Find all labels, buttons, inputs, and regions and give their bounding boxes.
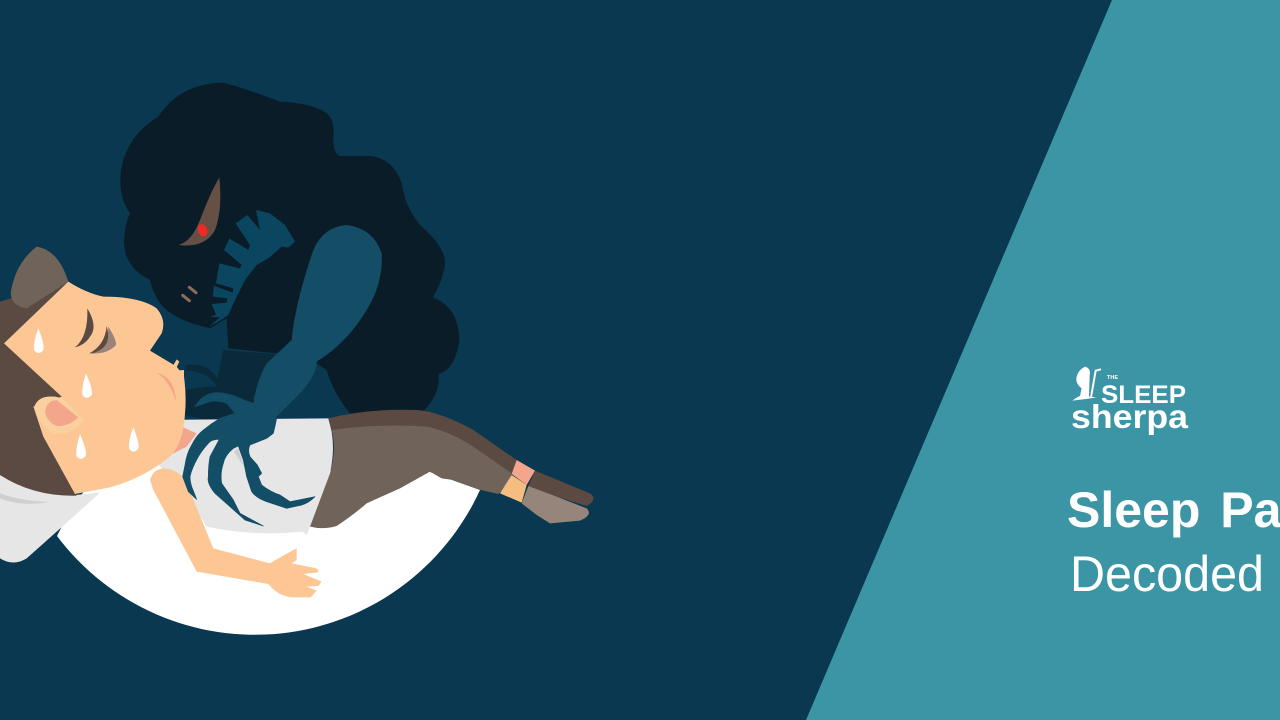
claw fingers (183, 393, 315, 526)
shadow monster (120, 83, 459, 415)
neck (168, 427, 197, 456)
monster body silhouette (120, 83, 459, 415)
sweat drop (129, 427, 139, 452)
mouth (168, 359, 184, 377)
eye shadow (89, 327, 116, 354)
red eye (196, 223, 209, 238)
nostrils (183, 287, 196, 301)
shirt (153, 418, 333, 535)
monster near arm (253, 225, 382, 420)
trousers shadow (328, 410, 517, 475)
panel: teal diagonal (806, 0, 1280, 720)
far foot (528, 471, 593, 506)
logo word sherpa: sherpa (1071, 398, 1189, 435)
monster claw hand (183, 393, 315, 526)
trousers (310, 426, 512, 528)
monster far arm and hand (185, 350, 275, 422)
sweat drop (34, 328, 44, 353)
logo small word: THE (1107, 375, 1118, 381)
arm and hand (150, 468, 322, 597)
title (1067, 482, 1280, 602)
pillow shape (0, 475, 100, 562)
figure body (1072, 367, 1097, 401)
icon: sherpa figure (1072, 367, 1101, 401)
sleeper head (0, 247, 197, 496)
logo: The Sleep Sherpa (1071, 367, 1189, 435)
hair (0, 282, 77, 496)
near foot sock (522, 486, 589, 523)
claw shadow on shirt (234, 448, 244, 467)
ankle skin (512, 460, 535, 485)
jagged teeth (209, 210, 295, 326)
white crescent moon (57, 440, 480, 635)
eyelashes (75, 308, 108, 353)
face (4, 282, 186, 494)
walking staff (1091, 369, 1101, 397)
cap (11, 247, 68, 308)
sweat drop (82, 373, 92, 398)
pillow fold (0, 493, 50, 504)
sweat drop (76, 434, 86, 459)
near ankle (500, 475, 527, 503)
sleeper body (150, 410, 593, 597)
subtitle line: Decoded (1070, 546, 1264, 602)
cheek line (156, 373, 176, 402)
pillow (0, 475, 100, 562)
logo word sleep: SLEEP (1101, 381, 1186, 409)
title bold line: Sleep Pa (1067, 482, 1280, 538)
inner ear (45, 400, 78, 426)
monster eye socket (178, 177, 220, 246)
ear (34, 396, 83, 434)
